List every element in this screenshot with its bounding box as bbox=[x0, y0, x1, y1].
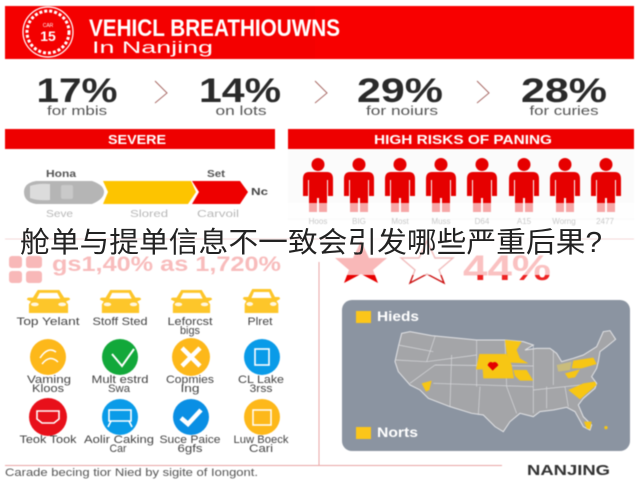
bar labels: Hona bbox=[46, 169, 77, 180]
heading: high risks bbox=[288, 129, 634, 149]
legend: Norts bbox=[356, 424, 418, 440]
stat: 28% bbox=[521, 72, 607, 118]
row 3 labels: Cari bbox=[249, 443, 273, 455]
stat: 29%: for noiurs bbox=[366, 104, 438, 118]
footnote: Carade becing tior Nied by sigite of Iongont. bbox=[5, 467, 258, 479]
people labels: Hoos bbox=[309, 217, 327, 226]
brand label: NANJING bbox=[527, 462, 610, 479]
bar labels: Seve bbox=[46, 209, 74, 220]
title: In Nanjing bbox=[92, 38, 213, 57]
row 2 circle icons bbox=[30, 338, 280, 376]
icon grid bbox=[16, 289, 289, 455]
people labels: A15 bbox=[517, 217, 532, 226]
legend: Norts: Norts bbox=[377, 424, 418, 440]
bar labels: Carvoil bbox=[197, 209, 239, 220]
row 2 labels: Swa bbox=[108, 383, 131, 395]
row 2 labels: Mult estrd bbox=[92, 374, 148, 386]
people labels: 2477 bbox=[596, 217, 614, 226]
arrows between stats bbox=[155, 81, 489, 103]
title bbox=[89, 15, 340, 57]
stat: 28%: for curies bbox=[530, 104, 598, 118]
people labels: BIG bbox=[352, 217, 366, 226]
row 2 labels bbox=[27, 374, 284, 395]
stat strip: faded percentages: gs1,40% as 1,720% bbox=[52, 253, 281, 276]
legend: Hieds: Hieds bbox=[377, 308, 419, 324]
stat: 17%: for mbis bbox=[47, 104, 107, 118]
bar segment: grey car bbox=[24, 181, 104, 204]
people labels: Muss bbox=[431, 217, 451, 226]
stat: 14% bbox=[199, 72, 281, 118]
row 1 labels: Plret bbox=[248, 316, 272, 328]
row 3 labels: Aolir Caking bbox=[84, 434, 154, 446]
bar labels: Set bbox=[207, 169, 226, 180]
row 1 labels: Top Yelant bbox=[16, 316, 80, 328]
bar labels bbox=[46, 169, 269, 220]
row 2 labels: Copmies bbox=[166, 374, 215, 386]
stats row bbox=[36, 72, 607, 118]
icon: round badge bbox=[23, 7, 73, 57]
people labels bbox=[309, 217, 614, 226]
map panel bbox=[342, 300, 630, 451]
row 1 labels: Leforcst bbox=[168, 316, 212, 328]
bar labels: Slored bbox=[130, 209, 168, 220]
stat: 29% bbox=[357, 72, 443, 118]
red heart marker bbox=[488, 362, 498, 371]
icon: round badge: CAR bbox=[43, 23, 54, 29]
stars and 44%: 44% bbox=[463, 249, 551, 288]
row 1 labels: Stoff Sted bbox=[92, 316, 148, 328]
stat: 29%: 29% bbox=[357, 72, 443, 110]
stat: 28%: 28% bbox=[521, 72, 607, 110]
stat: 17% bbox=[36, 72, 118, 118]
highlighted states bbox=[422, 340, 608, 429]
row 3 labels: 6gfs bbox=[178, 443, 203, 455]
row 3 labels: Car bbox=[110, 443, 127, 455]
severity bar bbox=[24, 169, 269, 220]
stat strip: faded percentages bbox=[9, 253, 281, 283]
row 2 labels: CL Lake bbox=[238, 374, 284, 386]
heading: severe: SEVERE bbox=[108, 132, 166, 147]
people labels: D64 bbox=[475, 217, 490, 226]
row 2 labels: Kloos bbox=[32, 383, 65, 395]
row 3 labels: Luw Boeck bbox=[234, 434, 289, 446]
icon: round badge: 15 bbox=[40, 28, 56, 44]
row 2 labels: Vaming bbox=[27, 374, 71, 386]
row 2 labels: Ing bbox=[180, 383, 200, 395]
faded divider bbox=[5, 238, 634, 240]
row 3 labels bbox=[20, 434, 289, 455]
people row bbox=[288, 150, 634, 226]
stat: 14%: 14% bbox=[199, 72, 281, 110]
row 2 labels: 3rss bbox=[250, 383, 273, 395]
bar segment: yellow bbox=[103, 181, 196, 204]
overlay caption: 舱单与提单信息不一致会引发哪些严重后果? bbox=[20, 227, 602, 259]
row 1 cars bbox=[27, 289, 280, 313]
people labels: Worng bbox=[552, 217, 576, 226]
people labels: Most bbox=[391, 217, 409, 226]
map: USA bbox=[395, 331, 616, 432]
header banner bbox=[5, 6, 634, 59]
title: VEHICL BREATHIOUWNS bbox=[89, 15, 340, 42]
legend: Hieds bbox=[356, 308, 419, 324]
bar labels: Nc bbox=[251, 187, 269, 198]
heading: severe bbox=[5, 129, 275, 149]
row 3 labels: Suce Paice bbox=[160, 434, 220, 446]
row 3 labels: Teok Took bbox=[20, 434, 77, 446]
heading: high risks: HIGH RISKS OF PANING bbox=[374, 132, 552, 147]
stars and 44% bbox=[330, 238, 570, 288]
bar segment: red bbox=[192, 181, 248, 204]
stat: 14%: on lots bbox=[216, 104, 266, 118]
panel frame lines bbox=[5, 262, 502, 466]
row 1 labels: bigs bbox=[180, 325, 200, 337]
row 3 circle icons bbox=[29, 398, 280, 436]
stat: 17%: 17% bbox=[36, 72, 118, 110]
row 1 labels bbox=[16, 316, 272, 337]
